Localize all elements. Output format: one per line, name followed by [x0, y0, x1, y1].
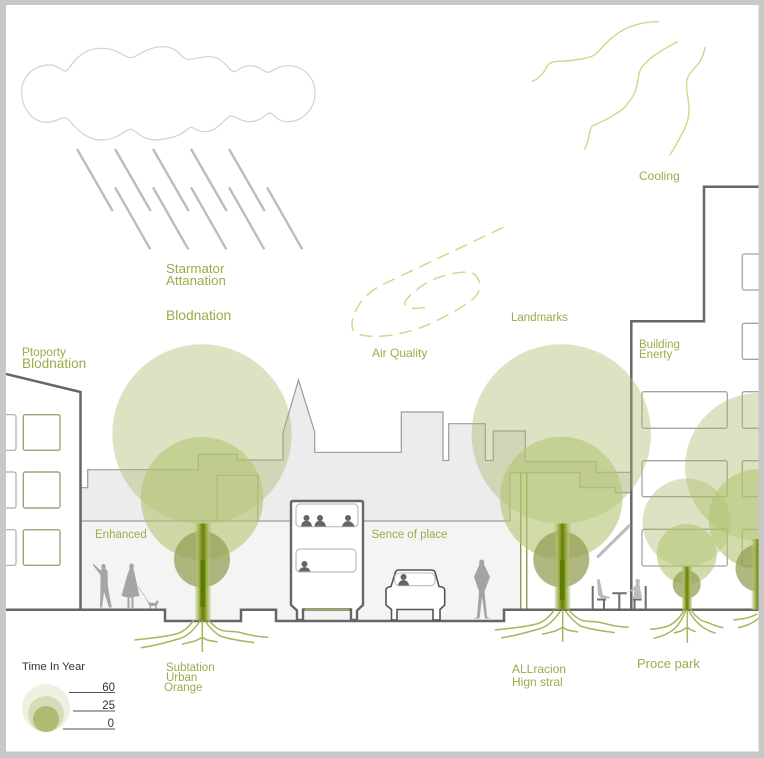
bus body	[291, 501, 363, 620]
label: Blodnation: Blodnation	[166, 308, 231, 323]
bus upper window	[296, 504, 358, 527]
left block windows	[23, 415, 60, 565]
cafe table and chairs	[593, 579, 646, 609]
legend: time in year	[22, 661, 115, 732]
tree: far right tree	[685, 393, 764, 610]
bus passengers	[298, 515, 354, 572]
icon: air quality dashed swirl	[352, 227, 503, 336]
label: Landmarks: Landmarks	[511, 312, 568, 324]
label: Building Enerty: Enerty	[639, 349, 672, 361]
label: Ptoporty Blodnation: Ptoporty	[22, 345, 66, 359]
legend values: 0	[108, 718, 114, 730]
person in dress	[122, 563, 140, 608]
label: Starmator Attanation: Attanation	[166, 273, 226, 288]
left block cut-off windows	[6, 414, 17, 566]
tree: left street tree	[112, 344, 292, 620]
label: Proce park: Proce park	[637, 656, 700, 671]
label: Subtation Urban Orange: Urban	[166, 672, 197, 684]
building: left block	[0, 374, 80, 610]
icon: rain cloud	[22, 47, 315, 249]
left block wall	[6, 374, 80, 610]
label: ALLracion Hign stral: Hign stral	[512, 675, 563, 689]
label: Sence of place: Sence of place	[372, 529, 448, 541]
bus wheel arch highlight	[305, 608, 349, 610]
roots: left tree	[134, 620, 268, 652]
car window	[395, 573, 435, 586]
rain streaks	[77, 149, 302, 249]
lamp posts	[521, 472, 527, 609]
pedestrian: standing figure	[474, 560, 490, 618]
pedestrians with dog	[92, 563, 158, 608]
label: Starmator Attanation: Starmator	[166, 261, 225, 276]
city skyline silhouette	[81, 380, 631, 521]
road surface line	[6, 610, 759, 621]
label: Building Enerty: Building	[639, 339, 680, 351]
dog and leash	[138, 587, 158, 608]
label: Air Quality: Air Quality	[372, 346, 427, 360]
cafe patrons	[597, 579, 642, 598]
roots: far right tree	[733, 614, 759, 628]
tree: park tree	[642, 478, 730, 610]
legend values	[102, 682, 115, 730]
person waving	[92, 564, 112, 608]
middle building outline	[217, 475, 258, 521]
car driver	[398, 574, 409, 586]
legend values: 25	[102, 700, 115, 712]
building: right block	[631, 187, 764, 610]
label: Subtation Urban Orange: Orange	[164, 682, 202, 694]
legend title: Time In Year	[22, 661, 85, 673]
legend values: 60	[102, 682, 115, 694]
bus	[291, 501, 363, 620]
bus lower window	[296, 549, 356, 572]
label: Cooling: Cooling	[639, 169, 680, 183]
car body	[386, 570, 445, 620]
label: Enhanced: Enhanced	[95, 529, 147, 541]
legend circles	[22, 684, 70, 732]
roots: park tree	[650, 610, 723, 643]
canopy ramp diagonal	[597, 525, 630, 557]
right block wall	[631, 187, 760, 610]
tree: landmark tree	[472, 344, 651, 610]
street ground fill	[81, 521, 521, 620]
right block windows	[642, 254, 764, 566]
icon: cooling breeze lines	[532, 22, 705, 155]
label: ALLracion Hign stral: ALLracion	[512, 662, 566, 676]
cloud outline	[22, 47, 315, 140]
roots: landmark tree	[495, 610, 629, 642]
car	[386, 570, 445, 620]
legend leader lines	[63, 692, 115, 729]
label: Ptoporty Blodnation: Blodnation	[22, 356, 86, 371]
table and chairs furniture	[593, 586, 646, 609]
label: Subtation Urban Orange: Subtation	[166, 662, 215, 674]
